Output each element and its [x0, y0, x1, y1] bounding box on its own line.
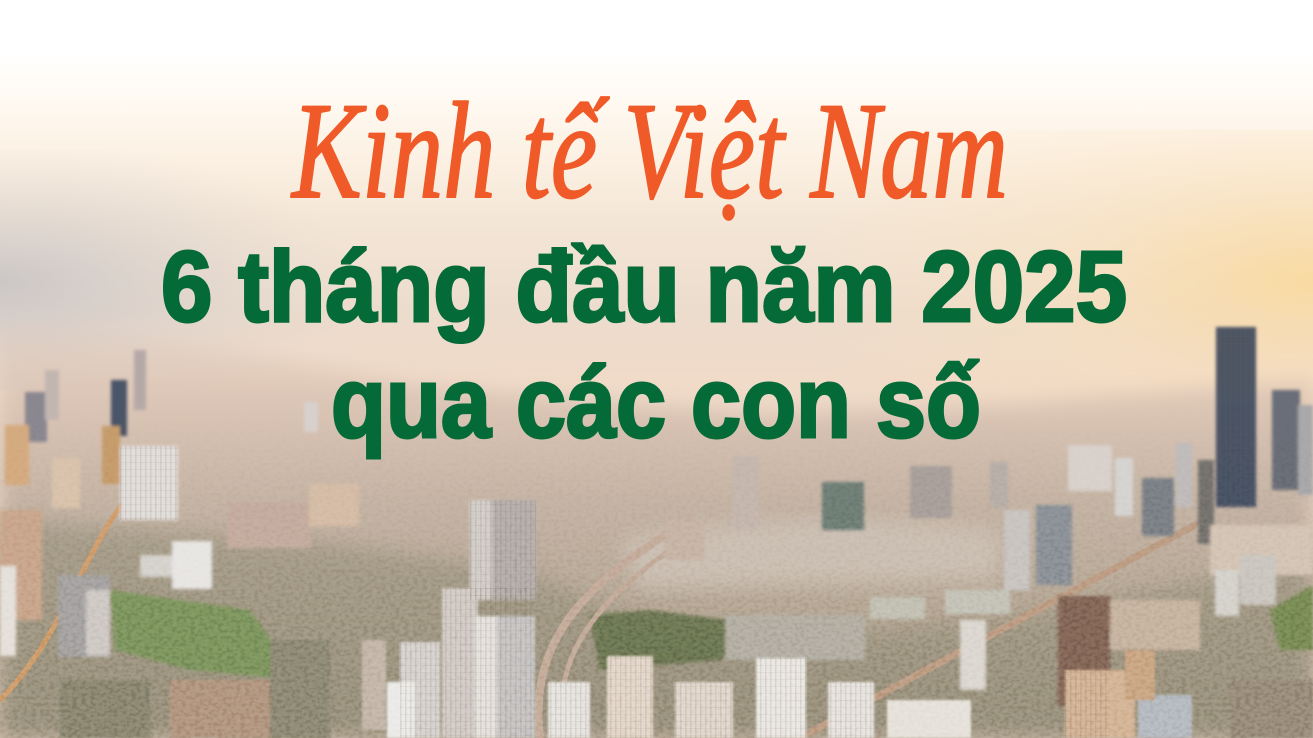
heading: 6 tháng đầu năm 2025: 6 tháng đầu năm 2025 — [161, 231, 1127, 343]
background: road — [0, 500, 1195, 738]
background: window texture on towers — [120, 327, 1256, 738]
background: buildings, right — [960, 327, 1313, 706]
background: buildings, foreground — [60, 588, 1313, 738]
background: fine city texture — [0, 531, 1313, 738]
background: buildings, far left — [0, 350, 359, 657]
background: hazy city ground — [0, 315, 1313, 738]
background: buildings, centre — [470, 456, 1072, 660]
title: Kinh tế Việt Nam: Kinh tế Việt Nam — [290, 74, 1008, 227]
heading: qua các con số: qua các con số — [331, 347, 981, 459]
